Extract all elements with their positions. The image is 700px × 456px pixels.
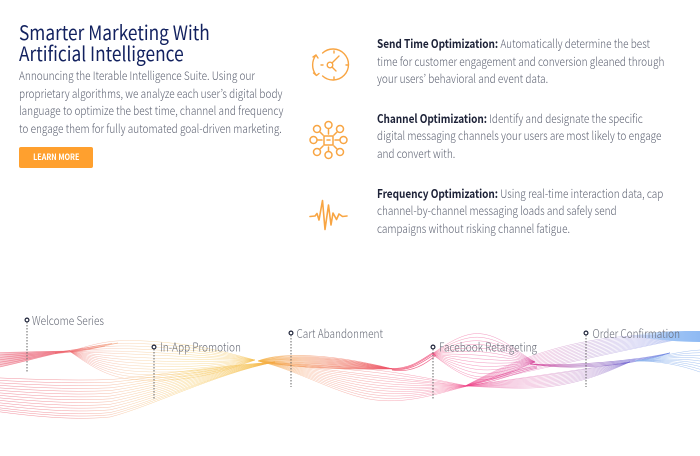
text: channel optimization: digital messaging channels your users are most likely to engage [377, 127, 661, 144]
marker: facebook retargeting: Facebook Retargeting [439, 338, 537, 356]
ribbon: lower red sweep [258, 356, 468, 411]
title: Artificial Intelligence [19, 38, 184, 67]
ribbon: red thin rising strand [55, 343, 118, 354]
text: frequency optimization: channel-by-channel messaging loads and safely send [377, 202, 617, 219]
text: send time optimization: Send Time Optimization: Automatically determine the best [377, 35, 650, 52]
text: frequency optimization: Frequency Optimization: Using real-time interaction data, cap [377, 184, 663, 202]
marker: in-app promotion: In-App Promotion [160, 338, 241, 356]
ribbon: blue right band [630, 331, 700, 342]
icon: frequency wave [309, 200, 348, 230]
button: learn more [19, 147, 93, 168]
ribbon: orange centre band [258, 353, 392, 372]
chart: wave timeline [0, 312, 700, 418]
ribbon: pink arc [432, 330, 535, 384]
marker: order confirmation: Order Confirmation [592, 325, 680, 342]
text: channel optimization: and convert with. [377, 145, 455, 162]
ribbon: red left band [0, 351, 70, 368]
marker: order confirmation [584, 325, 680, 387]
text: frequency optimization [377, 184, 663, 237]
marker: cart abandonment [289, 325, 384, 387]
intro text [19, 67, 284, 137]
marker: in-app promotion [152, 338, 241, 400]
intro text: language to optimize the best time, channel and frequency [19, 102, 283, 119]
title: Smarter Marketing With [19, 17, 210, 46]
ribbon: pink lower sweep [465, 362, 630, 399]
text: channel optimization: Channel Optimization: Identify and designate the specific [377, 110, 643, 126]
ribbon: magenta rising pinch [465, 366, 537, 386]
text: send time optimization: your users’ behavioral and event data. [377, 70, 548, 87]
marker: welcome series: Welcome Series [32, 312, 104, 329]
button: learn more: LEARN MORE [33, 151, 79, 163]
ribbon: red rising line [390, 352, 436, 371]
text: frequency optimization: campaigns without risking channel fatigue. [377, 220, 570, 237]
intro text: Announcing the Iterable Intelligence Suite. Using our [19, 67, 255, 84]
ribbon: peach upper arc [70, 338, 255, 385]
ribbon: blue right fan [635, 350, 700, 372]
ribbon: lower left sweep [0, 362, 275, 418]
intro text: to engage them for fully automated goal-driven marketing. [19, 120, 282, 137]
ribbon: purple dense band [530, 353, 670, 371]
text: send time optimization [377, 35, 664, 87]
text: channel optimization [377, 110, 661, 162]
icon: channel hub [309, 120, 348, 160]
title [19, 17, 210, 67]
intro text: proprietary algorithms, we analyze each user’s digital body [19, 85, 282, 102]
marker: facebook retargeting [431, 338, 537, 400]
marker: cart abandonment: Cart Abandonment [296, 325, 384, 342]
marker: welcome series [25, 312, 104, 373]
ribbon: mauve upper sweep [465, 318, 695, 386]
icon: clock [312, 48, 350, 81]
text: send time optimization: time for customer engagement and conversion gleaned through [377, 53, 664, 70]
